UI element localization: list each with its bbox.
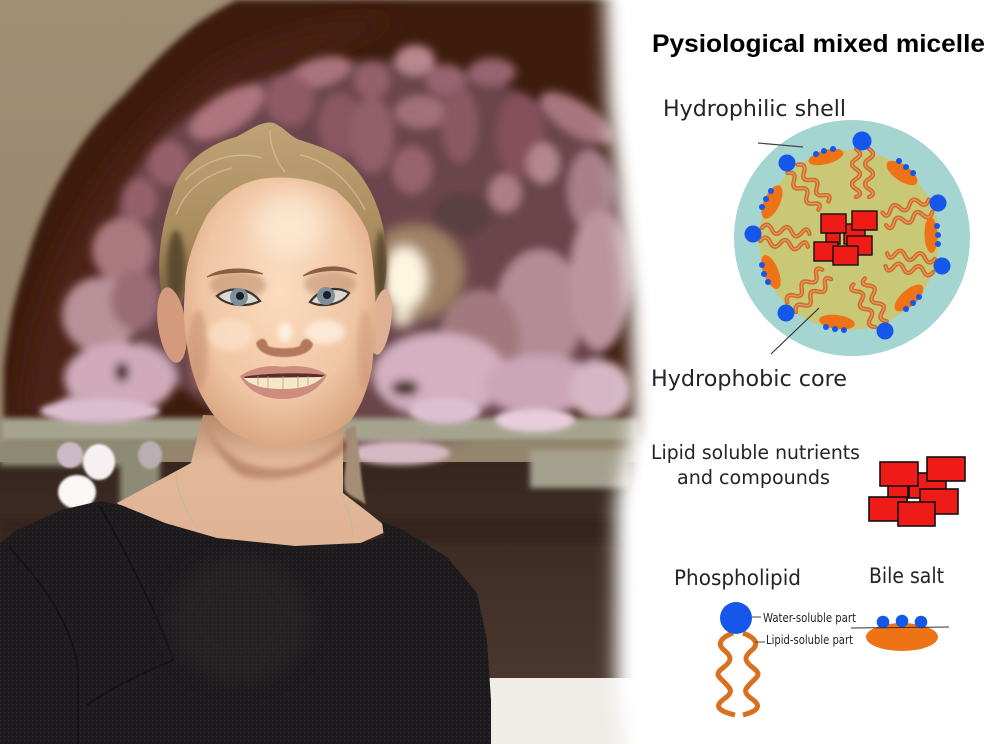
black sweater — [0, 501, 491, 744]
neck — [117, 415, 390, 570]
label: phospholipid: Phospholipid — [674, 566, 801, 590]
cheek and nose highlights — [188, 271, 373, 390]
phospholipid heads — [744, 132, 950, 340]
label: lipid soluble nutrients — [651, 441, 860, 489]
blurred hall background — [0, 0, 660, 744]
hair shadow by temples — [167, 230, 387, 300]
left eye — [217, 288, 260, 306]
phospholipid tails ring — [760, 149, 935, 329]
dark wooden arch — [4, 0, 660, 440]
necklace — [176, 472, 352, 542]
legend: phospholipid — [718, 602, 856, 715]
label: lipid soluble nutrients: and compounds — [677, 466, 830, 489]
dark lower wall — [0, 462, 660, 680]
legend: lipid soluble squares — [869, 457, 965, 526]
connector: lipid part — [755, 641, 765, 643]
hair — [159, 122, 387, 330]
right ear — [367, 288, 395, 356]
back-lit lamp glow — [365, 224, 465, 327]
bile salts — [757, 146, 938, 331]
pointer line: shell — [758, 143, 803, 147]
pale balcony band — [0, 418, 640, 442]
legend: bile salt — [851, 615, 949, 651]
phospholipid tails — [718, 633, 758, 715]
hydrophilic shell circle — [734, 120, 970, 356]
connector: water part — [752, 616, 761, 618]
hydrophobic core circle — [759, 150, 939, 330]
hair strands — [176, 130, 365, 215]
right eyebrow — [303, 267, 357, 276]
forehead highlight — [252, 193, 328, 257]
hair strand by neck — [344, 425, 366, 505]
sweater sleeve seam — [9, 507, 173, 744]
label: hydrophobic core: Hydrophobic core — [651, 366, 847, 392]
mouth — [240, 366, 327, 399]
right eye — [310, 287, 349, 305]
label: lipid-soluble part: Lipid-soluble part — [766, 633, 853, 647]
face — [184, 178, 376, 447]
left eyebrow — [207, 269, 263, 277]
pale floor at bottom — [480, 678, 660, 744]
bokeh lights — [57, 441, 162, 509]
chin shadow — [205, 425, 352, 479]
phospholipid head — [720, 602, 752, 634]
pointer line: core — [771, 308, 819, 354]
bile salt blue dots — [759, 146, 941, 333]
carved pink rosette — [57, 45, 640, 450]
nose — [256, 339, 313, 357]
white fade on photo edge — [604, 0, 1008, 744]
label: bile salt: Bile salt — [869, 564, 944, 588]
label: water-soluble part: Water-soluble part — [763, 611, 856, 625]
arch inner red-brown tone — [20, 18, 400, 420]
core lipid soluble squares — [814, 211, 877, 265]
left ear — [153, 285, 191, 365]
micelle diagram — [734, 120, 970, 356]
sweater chest sheen — [170, 560, 310, 680]
label: hydrophilic shell: Hydrophilic shell — [663, 96, 846, 122]
label: lipid soluble nutrients: Lipid soluble nutrients — [651, 441, 860, 464]
title: Pysiological mixed micelle — [652, 30, 985, 58]
